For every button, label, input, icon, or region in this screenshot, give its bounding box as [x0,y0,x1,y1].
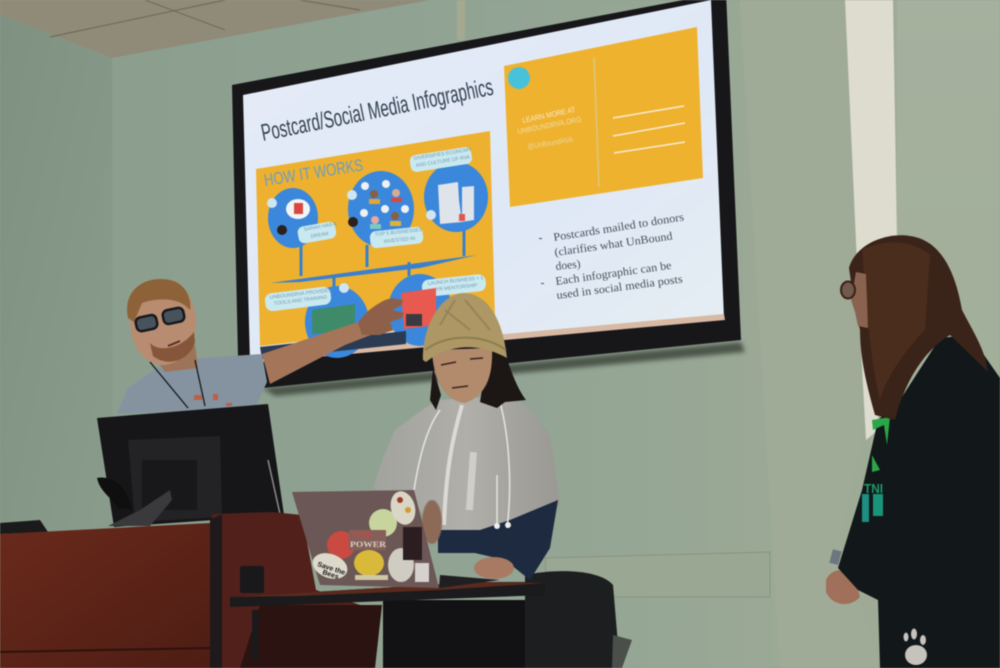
hair [127,279,190,322]
presentation control bar [260,331,406,359]
sticker: bees [309,549,351,583]
sticker: yellow [354,550,384,576]
slide background [243,0,724,362]
shirt print [194,394,232,406]
green print: TNI [864,481,883,496]
laptop base [439,575,500,588]
shirt [117,354,267,414]
lower shadow [240,605,382,668]
table leg bracket [252,610,258,660]
right hand [474,557,514,579]
thought bubble [286,199,310,219]
postcard panel [504,27,703,207]
postcard text: UNBOUNDRVA.ORG [517,115,582,136]
connector bar [270,255,477,283]
cable bundle [97,477,132,510]
face [851,272,868,328]
pill labels: TOOLS AND TRAINING [274,294,328,307]
podium side [212,512,375,668]
ceiling tile lines [50,0,360,37]
monitor stand [128,436,222,522]
wall-mounted display [232,0,745,396]
slide bullet text: used in social media posts [556,273,684,302]
step 5 circle [424,162,488,232]
monitor body [97,404,284,527]
earphones [414,402,510,528]
display bezel [232,0,741,388]
postcard divider [594,57,599,187]
lanyard [150,360,205,408]
infographic slide image [256,131,495,359]
step 4 circle [388,274,452,346]
white column [845,0,897,440]
mouth [168,341,180,346]
face [130,279,196,365]
presenter man [117,279,404,414]
number badges [267,190,436,293]
sticker: label [415,563,429,582]
heading: HOW IT WORKS [263,156,364,190]
table top [230,582,545,607]
paw print [904,628,927,665]
stems [301,230,464,288]
wooden podium [0,512,382,668]
pill labels: INVESTED IN [384,236,416,245]
laptop with stickers: Bees [321,569,340,581]
monitor edge highlight [268,460,280,514]
side table [230,582,545,660]
slide bullet text: does) [555,258,581,273]
sticker: red badge [327,531,355,559]
green print [862,417,890,522]
pill labels: UNBOUNDRVA PROVIDES [270,287,332,301]
slide bullet text: Postcards mailed to donors [553,211,685,244]
knit hat [423,293,507,362]
pill labels: AND CULTURE OF RVA [415,154,471,169]
hand [358,298,404,335]
pill labels: DIVERSIFIES ECONOMY [413,147,473,162]
green chalkboard [312,304,355,334]
red shop [401,288,436,329]
bracelet [829,549,842,565]
face [432,348,492,403]
ceiling [0,0,430,58]
postcard text [517,105,582,151]
laptop lid [292,490,439,588]
podium seam [0,648,210,652]
slide bullet text: (clarifies what UnBound [554,230,674,259]
slide title: Postcard/Social Media Infographics [259,74,496,147]
arm [262,319,376,384]
lower wall panel [545,552,770,597]
vertical wall strip [457,0,465,40]
step 2 circle [305,286,369,358]
sticker: girl power [349,530,387,550]
neck [150,345,198,372]
beard [150,332,195,362]
sweatshirt [838,335,1000,668]
address lines [613,106,685,153]
podium front [0,523,210,668]
back chair [525,571,620,668]
step 3 circle [348,171,414,247]
postcard text: LEARN MORE AT [522,105,577,125]
slide bullet text [539,211,685,302]
mount arm [108,490,172,526]
sticker: dark photo [403,527,422,560]
team figures [348,180,409,229]
eyes and mouth [441,358,483,388]
logo badge [508,67,530,89]
sticker: girl power: POWER [350,539,387,549]
step 1 circle [268,188,318,248]
peach lower band [252,314,725,362]
display shadow [262,342,745,396]
wall section beside column [740,0,880,668]
trousers [383,600,525,668]
bracket [240,566,264,593]
pill labels: SARAH HAS A [303,221,338,233]
glasses [135,307,185,332]
glasses [841,282,855,298]
buildings [438,182,462,224]
pill labels [270,147,484,307]
hair [480,352,526,408]
sticker: globe [369,509,397,537]
standing woman on right [826,235,1000,668]
sticker: flowers [387,488,419,528]
pill labels: YR MENTORSHIP [436,283,478,293]
label pills [264,146,487,312]
podium computer monitor [97,404,284,527]
pill labels: DREAM [310,231,329,240]
left hand [422,500,442,544]
presenter woman [373,293,632,668]
yellow panel [256,131,495,346]
sticker: portrait [388,548,414,582]
laptop with stickers: Save the [316,561,346,577]
jacket [373,396,560,545]
Sarah figure [277,225,287,235]
left wall [0,15,113,535]
pill labels: TOP 5 BUSINESSES [375,227,423,238]
side dark strip [210,514,222,668]
postcard text: @UnBoundRVA [527,135,574,151]
navy sleeve and hem [438,500,558,580]
black device on podium [0,520,48,534]
jacket zipper [444,405,462,525]
laptop with stickers [292,488,500,588]
sticker: girl power: G'RL [353,530,373,539]
postcard preview [504,27,703,207]
pill labels: LAUNCH BUSINESS + 1 [428,275,484,287]
right wall [870,0,1000,668]
hair [849,235,988,420]
hand [826,570,860,604]
slide bullet text: Each infographic can be [555,260,672,288]
